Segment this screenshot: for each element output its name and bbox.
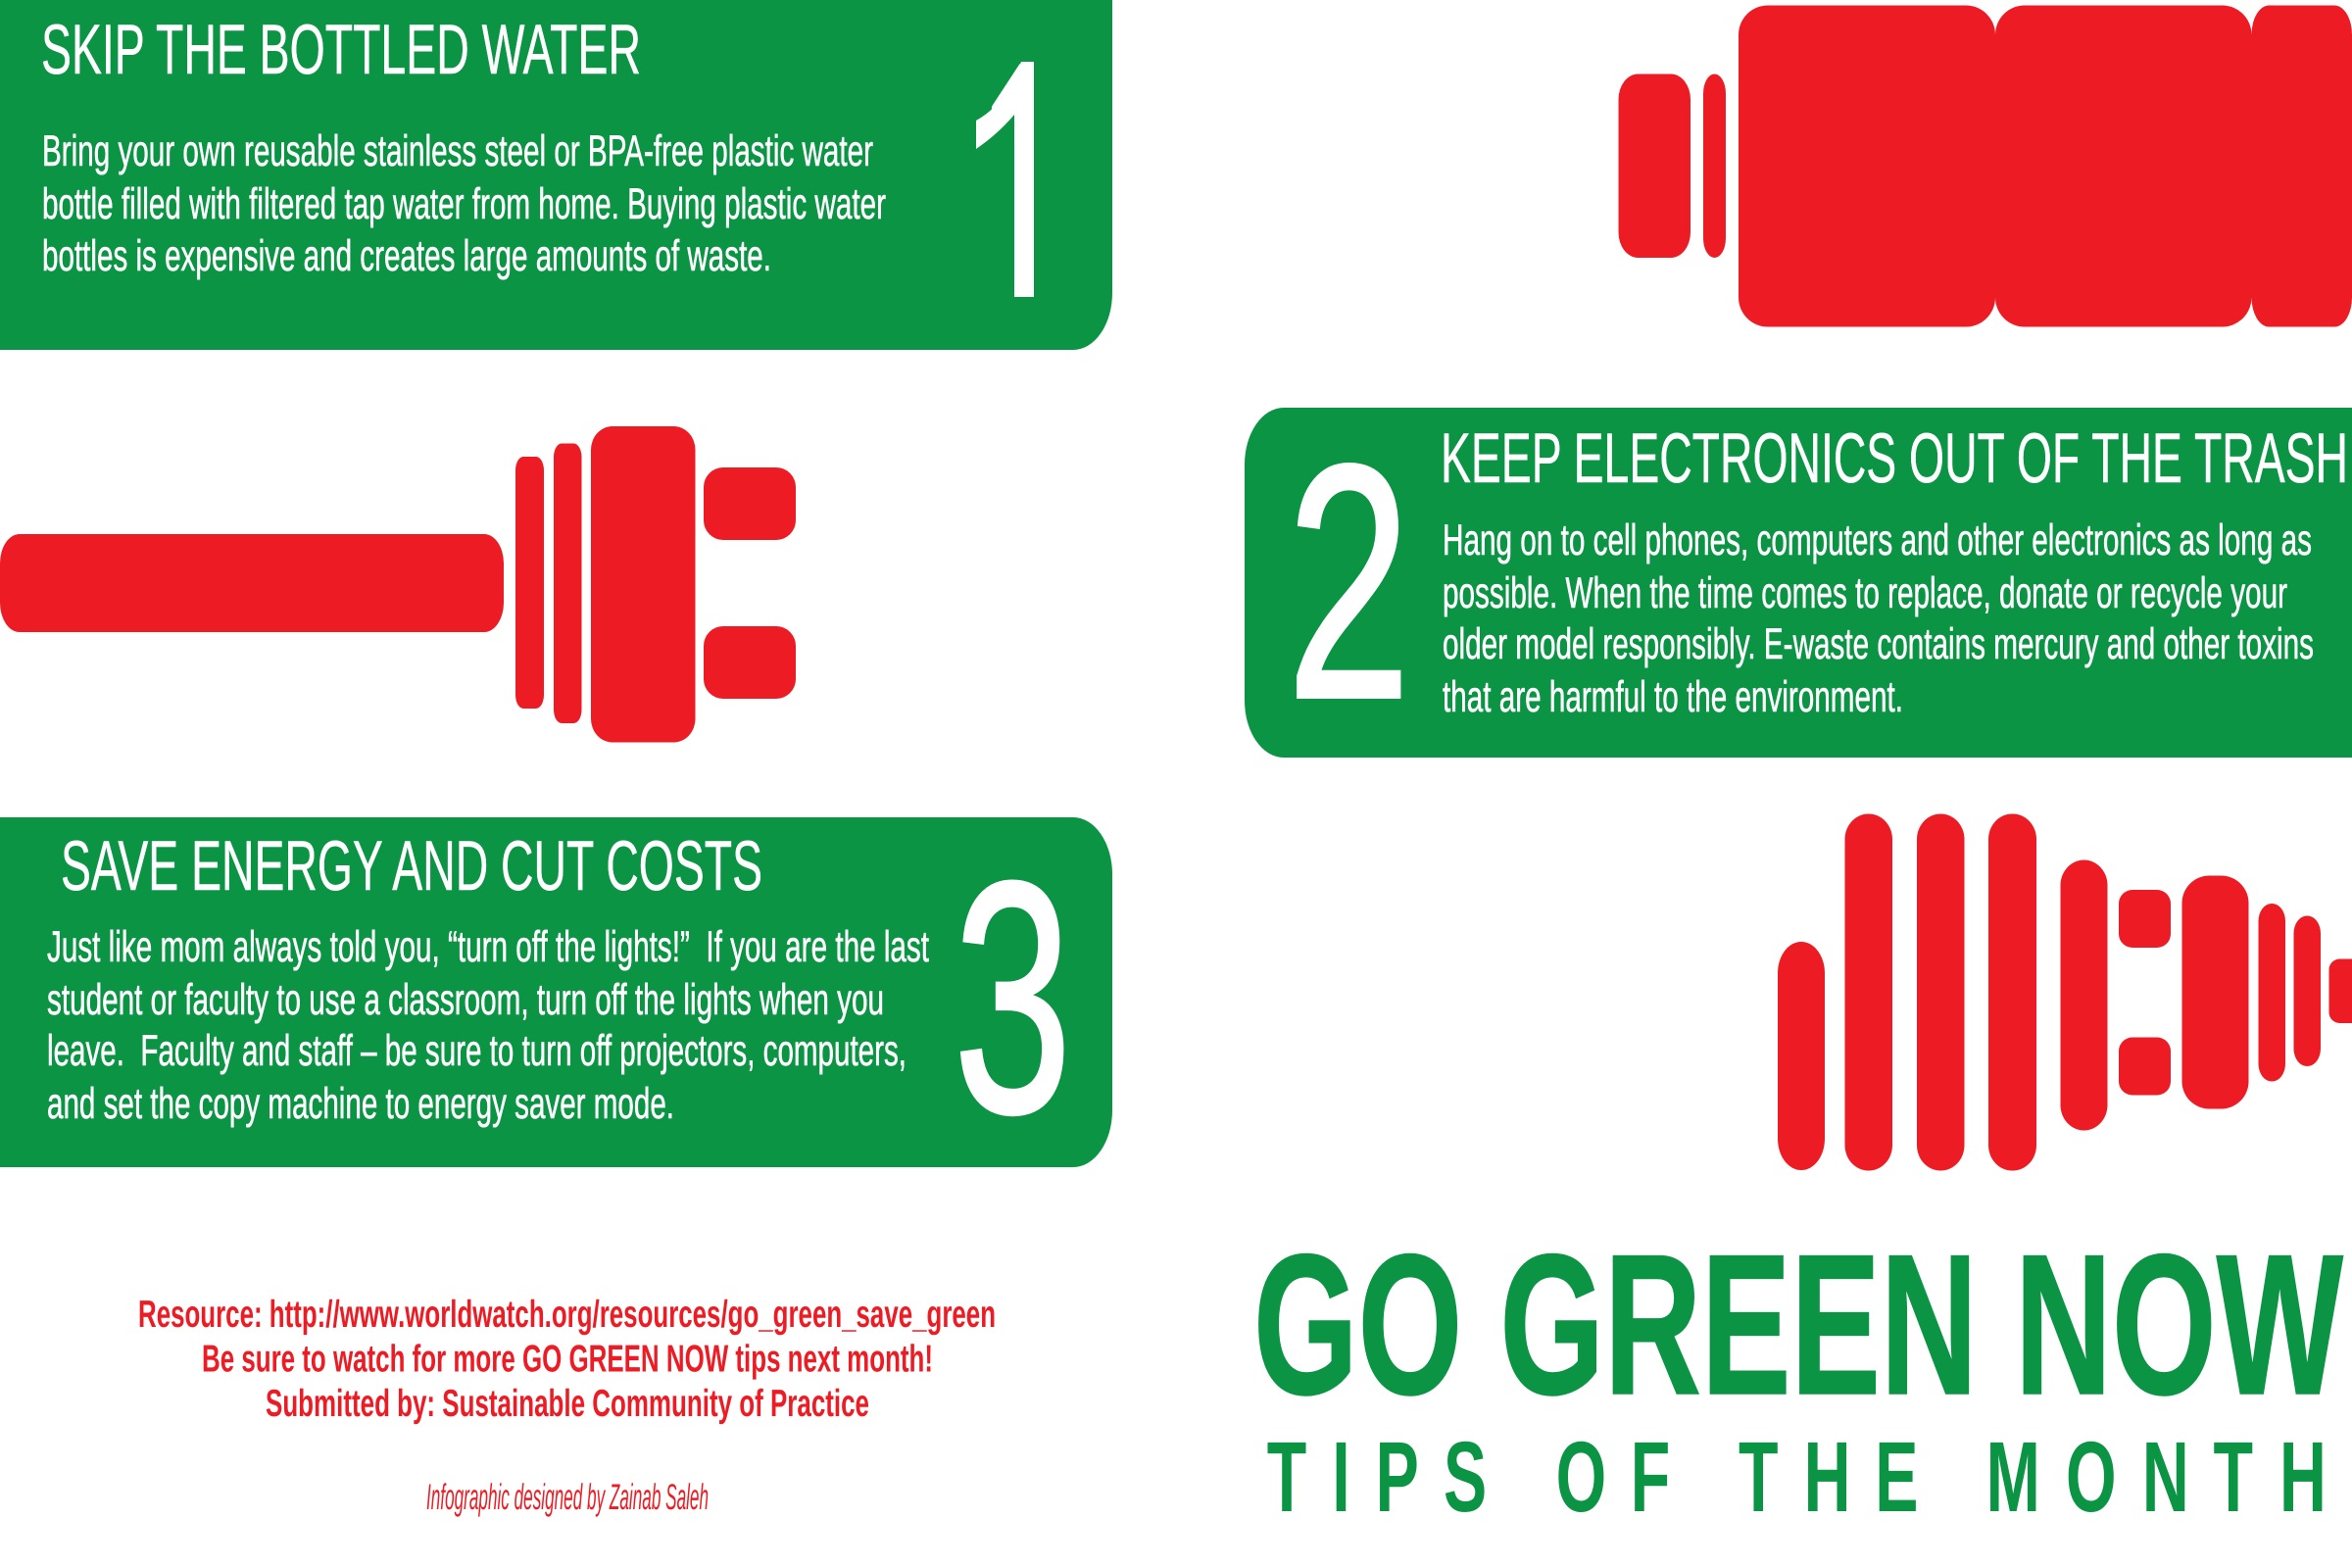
number 1: 1 <box>967 29 1071 340</box>
number 2: 2 <box>1287 396 1411 768</box>
panel: tip 2 keep electronics out of the trash <box>1245 396 2352 768</box>
panel: tip 1 skip the bottled water <box>0 0 1112 350</box>
body text: tip 1: bottles is expensive and creates large amounts of waste. <box>42 232 771 280</box>
heading: tip 1: SKIP THE BOTTLED WATER <box>41 11 641 89</box>
subtitle: tips of the month: TIPS OF THE MONTH <box>1267 1421 2327 1533</box>
text: Infographic designed by Zainab Saleh <box>426 1477 709 1517</box>
body text: tip 1: Bring your own reusable stainless steel or BPA-free plastic water <box>42 127 873 175</box>
credits: resource and submission: Be sure to watch for more GO GREEN NOW tips next month! <box>202 1339 933 1380</box>
body text: tip 2: that are harmful to the environment. <box>1443 673 1903 721</box>
body text: tip 3: leave. Faculty and staff – be sure to turn off projectors, computers, <box>47 1027 906 1075</box>
panel: tip 3 save energy and cut costs <box>0 814 1112 1182</box>
number 3: 3 <box>954 814 1072 1182</box>
body text: tip 3 <box>47 923 929 1128</box>
credits: resource and submission <box>138 1294 996 1425</box>
credits: resource and submission: Submitted by: Sustainable Community of Practice <box>266 1383 869 1425</box>
credits: resource and submission: Resource: http://www.worldwatch.org/resources/go_green_save_green <box>138 1294 996 1336</box>
body text: tip 1: bottle filled with filtered tap water from home. Buying plastic water <box>42 180 886 228</box>
body text: tip 1 <box>42 127 886 280</box>
body text: tip 3: student or faculty to use a classroom, turn off the lights when you <box>47 976 884 1024</box>
heading: tip 3: SAVE ENERGY AND CUT COSTS <box>61 827 762 906</box>
icon: spark plug / light bulb bars <box>1778 813 2352 1170</box>
body text: tip 3: Just like mom always told you, “turn off the lights!” If you are the last <box>47 923 929 971</box>
icon: electrical plug <box>0 426 796 743</box>
body text: tip 2 <box>1443 516 2314 721</box>
body text: tip 3: and set the copy machine to energy saver mode. <box>47 1080 674 1128</box>
icon: water bottle <box>1619 6 2352 327</box>
